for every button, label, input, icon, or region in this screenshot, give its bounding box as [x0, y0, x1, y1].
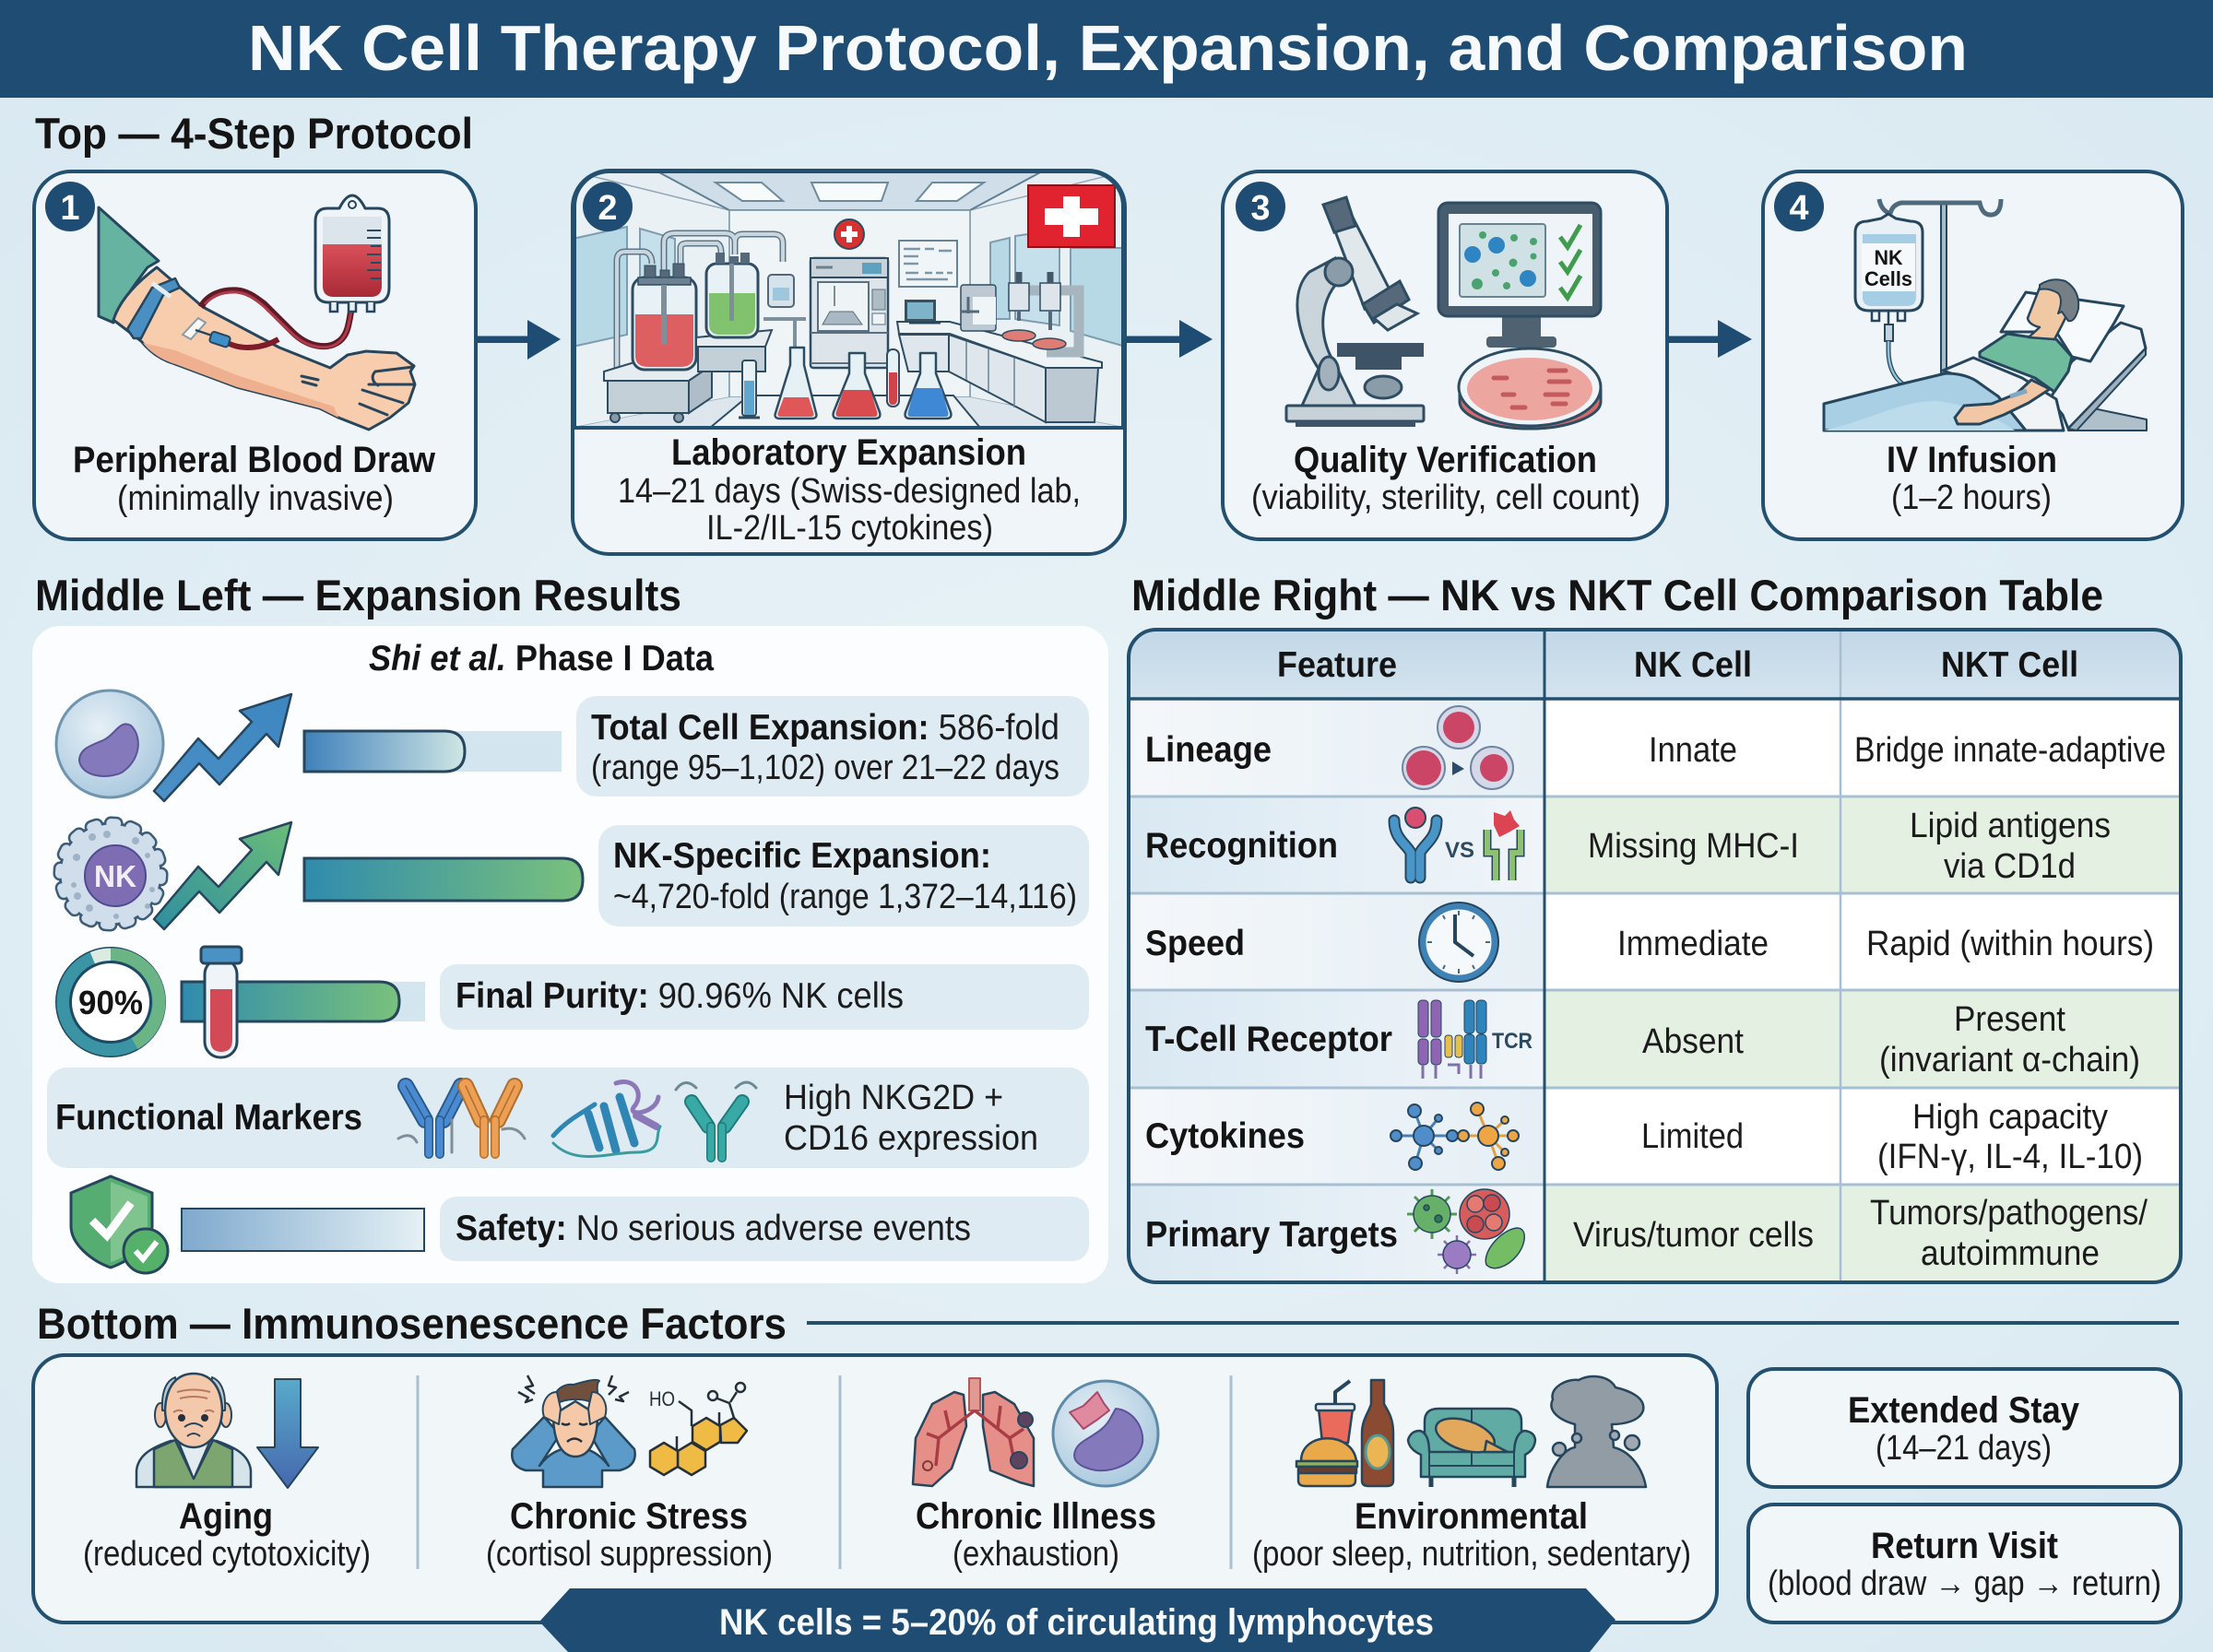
- label: chronic illness: Chronic Illness: [916, 1496, 1156, 1537]
- label: chronic stress: Chronic Stress: [510, 1496, 748, 1537]
- callout: NK specific: ~4,720-fold (range 1,372–14,116): [613, 878, 1077, 916]
- text: NKG2D and CD16: CD16 expression: [784, 1119, 1038, 1158]
- row: lineage: Bridge innate-adaptive: [1854, 731, 2166, 770]
- label: step 3: [1251, 440, 1640, 517]
- lab counter with cabinets: [897, 272, 1102, 422]
- row: primary targets: [1145, 1189, 2148, 1274]
- label: NK Cells bag: [1862, 243, 1915, 291]
- callout: safety: Safety: No serious adverse events: [456, 1209, 971, 1248]
- text: NKG2D and CD16: [784, 1079, 1038, 1158]
- icon: NK cell with rising arrow: NK: [94, 859, 136, 893]
- callout: NK specific: NK-Specific Expansion:: [613, 836, 991, 876]
- icon: lineage cells: [1402, 706, 1513, 789]
- box: extended stay: Extended Stay: [1848, 1390, 2080, 1431]
- wall chart: [899, 241, 957, 287]
- heading: bottom section: Bottom — Immunosenescence Factors: [37, 1299, 787, 1348]
- panel: expansion results: [32, 626, 1108, 1283]
- icon: lymphocyte with rising arrow: [56, 690, 291, 801]
- callout: safety: [440, 1197, 1089, 1261]
- row: T-cell receptor: Present: [1954, 1000, 2065, 1039]
- badge 4: [1774, 182, 1824, 231]
- heading: middle right: Middle Right — NK vs NKT Cell Comparison Table: [1131, 571, 2103, 620]
- row: total cell expansion: [56, 690, 1089, 801]
- row: NK-specific expansion: [60, 822, 1089, 929]
- illustration: cell culture lab: [573, 171, 1126, 428]
- table header row: [1277, 645, 2078, 685]
- panel: step 3 quality verification: [1223, 171, 1667, 539]
- badge 1: [45, 182, 95, 231]
- row: lineage: [1145, 706, 2166, 789]
- label: step 4: [1887, 440, 2057, 517]
- label: step 2: IL-2/IL-15 cytokines): [706, 509, 993, 548]
- label: step 1: [73, 440, 436, 518]
- label: environmental: (poor sleep, nutrition, sedentary): [1252, 1535, 1691, 1574]
- icon: clock: [1419, 903, 1498, 982]
- flasks and tubes: [739, 348, 951, 419]
- row: cytokines: Limited: [1641, 1117, 1744, 1156]
- label: chronic illness: (exhaustion): [953, 1535, 1119, 1574]
- icon: monitor with petri dish: [1438, 203, 1601, 429]
- row: T-cell receptor: [1145, 1000, 2140, 1080]
- icon: receptors vs: [1394, 808, 1521, 880]
- row: final purity: [55, 947, 1089, 1057]
- icon: microscope: [1286, 197, 1424, 427]
- label: chronic stress: (cortisol suppression): [486, 1535, 773, 1574]
- text: NKG2D and CD16: High NKG2D +: [784, 1079, 1003, 1117]
- arrow 3 to 4: [1667, 320, 1752, 358]
- label: environmental: [1252, 1496, 1691, 1574]
- factor: aging: [83, 1374, 371, 1574]
- label: NK Cells bag: NK: [1874, 246, 1903, 269]
- row: speed: Speed: [1145, 924, 1245, 963]
- heading: middle left: Middle Left — Expansion Results: [35, 571, 681, 620]
- label: chronic illness: [916, 1496, 1156, 1574]
- row: cytokines: Cytokines: [1145, 1116, 1305, 1156]
- factor: environmental: [1252, 1376, 1691, 1574]
- label: step 4: (1–2 hours): [1891, 478, 2052, 517]
- row: T-cell receptor: (invariant α-chain): [1879, 1041, 2140, 1080]
- label: step 3: Quality Verification: [1294, 440, 1597, 480]
- icon: 90 percent ring: [55, 947, 166, 1057]
- callout: total cell: Total Cell Expansion: 586-fold: [591, 708, 1059, 748]
- badge 2: [583, 182, 633, 231]
- label: NK Cells bag: Cells: [1864, 267, 1912, 290]
- label: step 2: Laboratory Expansion: [671, 432, 1026, 473]
- label: aging: [83, 1496, 371, 1574]
- label: functional markers: Functional Markers: [55, 1098, 362, 1138]
- table header row: NK Cell: [1634, 645, 1752, 685]
- panel: immunosenescence factors: [33, 1355, 1717, 1622]
- row: recognition: Missing MHC-I: [1588, 827, 1799, 866]
- icon: older man and down arrow: [136, 1374, 318, 1488]
- header banner: [0, 0, 2213, 98]
- bar: safety: [182, 1209, 424, 1251]
- icon: teal antibody: [676, 1082, 756, 1158]
- red bioreactor on stand: [604, 264, 714, 422]
- comparison table: [1129, 630, 2181, 1282]
- medical sign: [834, 219, 864, 249]
- heading: top section: Top — 4-Step Protocol: [35, 109, 473, 158]
- icon: lungs and exhausted cell: [913, 1378, 1158, 1486]
- ribbon: NK cell fraction: [539, 1588, 1615, 1652]
- label: step 3: (viability, sterility, cell count): [1251, 478, 1640, 517]
- table header row: NKT Cell: [1941, 645, 2078, 685]
- box: return visit: Return Visit: [1871, 1526, 2058, 1566]
- factor: chronic illness: [913, 1378, 1158, 1574]
- label: step 2: 14–21 days (Swiss-designed lab,: [618, 472, 1081, 511]
- bar: NK specific: [304, 858, 583, 901]
- box: return visit: (blood draw → gap → return): [1768, 1564, 2161, 1603]
- row: recognition: [1145, 807, 2111, 886]
- icon: cytokine networks: [1391, 1103, 1519, 1170]
- label: step 2: [618, 432, 1081, 548]
- label: step 1: Peripheral Blood Draw: [73, 440, 436, 480]
- arrow 2 to 3: [1127, 320, 1213, 358]
- callout: total cell: (range 95–1,102) over 21–22 days: [591, 749, 1059, 787]
- icon: 90 percent ring: 90%: [78, 984, 143, 1021]
- badge 2: 2: [598, 189, 618, 228]
- icon: TCR complex: [1418, 1000, 1533, 1079]
- row: lineage: Lineage: [1145, 730, 1272, 770]
- icon: blood test tube: [201, 947, 242, 1057]
- row: cytokines: [1145, 1098, 2143, 1176]
- row: primary targets: Tumors/pathogens/: [1870, 1194, 2148, 1233]
- callout: purity: [440, 964, 1089, 1030]
- callout: total cell: [576, 696, 1089, 796]
- box: return visit: [1748, 1504, 2181, 1622]
- icon: antibodies: [398, 1086, 525, 1154]
- bar: purity: [182, 982, 425, 1021]
- icon: safety shield: [71, 1176, 168, 1273]
- callout: NK specific: [598, 825, 1089, 926]
- icon: stressed person and cortisol molecule: [512, 1375, 747, 1487]
- label: aging: (reduced cytotoxicity): [83, 1535, 371, 1574]
- row: T-cell receptor: T-Cell Receptor: [1145, 1020, 1392, 1059]
- row: cytokines: High capacity: [1912, 1098, 2108, 1137]
- icon: pathogens: [1407, 1189, 1524, 1274]
- badge 4: 4: [1789, 189, 1809, 228]
- label: chronic stress: [486, 1496, 773, 1574]
- icon: stressed person and cortisol molecule: HO: [649, 1387, 675, 1410]
- foreground bench: [710, 395, 980, 428]
- callout: purity: Final Purity: 90.96% NK cells: [456, 976, 904, 1016]
- label: aging: Aging: [179, 1496, 273, 1537]
- label: step 1: (minimally invasive): [117, 479, 394, 518]
- panel: step 4 IV infusion: [1763, 171, 2183, 539]
- culture machine: [811, 258, 888, 368]
- row: primary targets: autoimmune: [1921, 1234, 2100, 1273]
- icon: receptors vs: VS: [1445, 838, 1474, 863]
- row: speed: [1145, 903, 2154, 982]
- icon: protein ribbon: [553, 1082, 660, 1156]
- swiss flag: [1028, 185, 1115, 247]
- green bioreactor on table: [696, 253, 772, 372]
- icon: TCR complex: TCR: [1492, 1029, 1533, 1054]
- box: extended stay: [1748, 1369, 2181, 1487]
- label: environmental: Environmental: [1355, 1496, 1588, 1537]
- badge 1: 1: [60, 189, 80, 228]
- icon: junk food, couch and smoke: [1296, 1376, 1646, 1487]
- icon: patient in bed: [1824, 279, 2147, 431]
- row: safety: [71, 1176, 1089, 1273]
- row: lineage: Innate: [1649, 731, 1737, 770]
- title: NK Cell Therapy Protocol, Expansion, and Comparison: [248, 12, 1968, 84]
- badge 3: 3: [1250, 189, 1271, 228]
- instrument on stand: [763, 275, 806, 353]
- row: primary targets: Virus/tumor cells: [1573, 1216, 1814, 1255]
- box: extended stay: (14–21 days): [1876, 1429, 2052, 1468]
- row: cytokines: (IFN-γ, IL-4, IL-10): [1877, 1138, 2143, 1176]
- table header row: Feature: [1277, 645, 1397, 685]
- arrow 1 to 2: [477, 320, 561, 360]
- bar: total cell: [304, 731, 562, 772]
- row: T-cell receptor: Absent: [1642, 1022, 1744, 1061]
- ribbon: NK cell fraction: NK cells = 5–20% of circulating lymphocytes: [719, 1602, 1434, 1643]
- row: recognition: Recognition: [1145, 826, 1338, 866]
- panel: step 1 peripheral blood draw: [34, 171, 476, 539]
- row: recognition: via CD1d: [1944, 847, 2076, 886]
- icon: arm with blood bag: [99, 195, 415, 430]
- icon: NK cell with rising arrow: [60, 822, 291, 929]
- badge 3: [1236, 182, 1285, 231]
- label: step 4: IV Infusion: [1887, 440, 2057, 480]
- row: primary targets: Primary Targets: [1145, 1215, 1398, 1255]
- panel: step 2 laboratory expansion: [573, 171, 1126, 554]
- panel subtitle: Shi et al. Phase I Data: [369, 639, 714, 678]
- row: speed: Immediate: [1617, 925, 1769, 963]
- row: recognition: Lipid antigens: [1910, 807, 2111, 845]
- factor: chronic stress: [486, 1375, 773, 1574]
- icon: IV pole and bag: [1855, 199, 2001, 384]
- row: functional markers: [47, 1068, 1089, 1168]
- row: speed: Rapid (within hours): [1866, 925, 2154, 963]
